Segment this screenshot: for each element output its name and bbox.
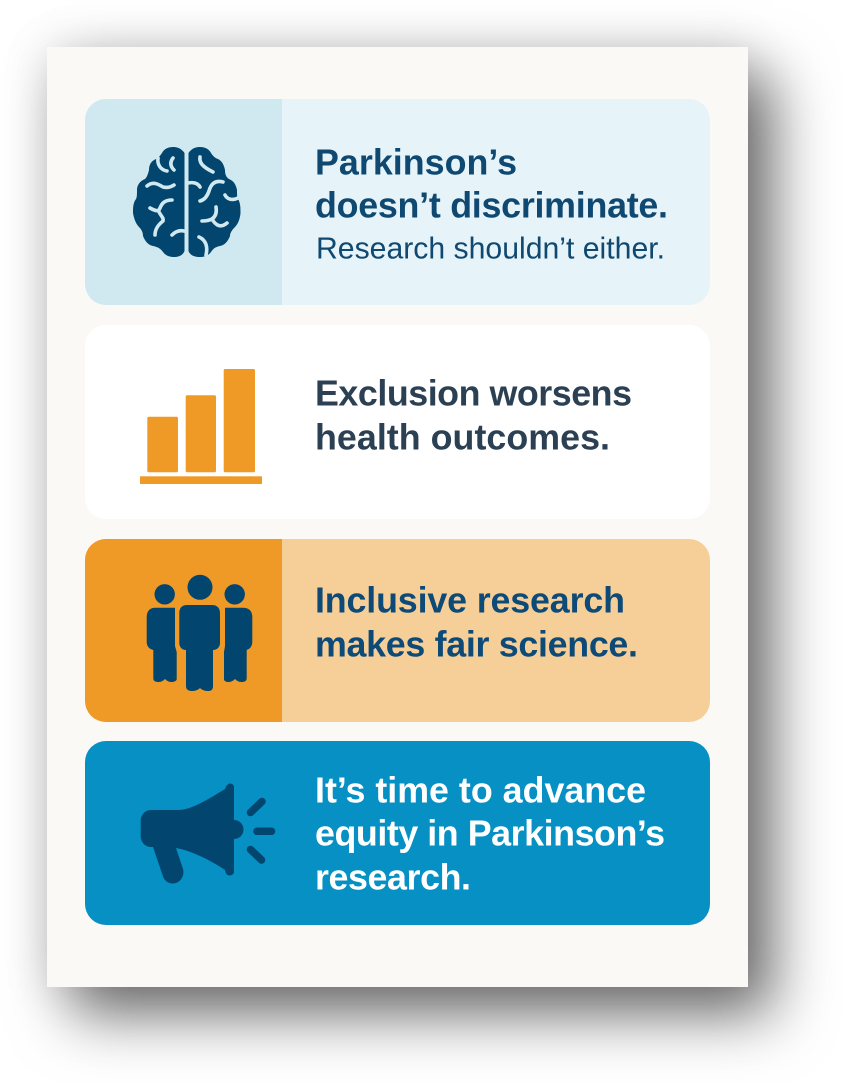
heading: Exclusion worsens health outcomes: health outcomes. [315, 418, 610, 458]
infographic content [85, 99, 710, 925]
heading: Parkinson's doesn't discriminate: Parkinson’s [315, 142, 517, 182]
heading: It's time to advance equity in Parkinson's research: It’s time to advance [315, 770, 646, 810]
icon: bar chart [140, 369, 262, 484]
heading: Inclusive research makes fair science [315, 580, 638, 664]
icon: megaphone [141, 784, 272, 884]
poster background sheet [47, 47, 748, 987]
heading: Parkinson's doesn't discriminate: Research shouldn’t either. [316, 232, 665, 266]
heading: Exclusion worsens health outcomes [315, 374, 632, 458]
panel: It's time to advance equity [85, 741, 710, 925]
heading: Parkinson's doesn't discriminate: doesn’t discriminate. [315, 186, 668, 226]
panel: Parkinson's doesn't discriminate [85, 99, 710, 305]
icon: three people [147, 575, 252, 691]
heading: Inclusive research makes fair science: makes fair science. [315, 624, 638, 664]
heading: Exclusion worsens health outcomes: Exclusion worsens [315, 374, 632, 414]
heading: It's time to advance equity in Parkinson's research: research. [315, 858, 471, 898]
panel: Inclusive research makes fair science [85, 539, 710, 722]
heading: Parkinson's doesn't discriminate [315, 142, 668, 266]
heading: Inclusive research makes fair science: Inclusive research [315, 580, 625, 620]
icon: brain [133, 147, 240, 257]
heading: It's time to advance equity in Parkinson's research [315, 770, 665, 898]
heading: It's time to advance equity in Parkinson's research: equity in Parkinson’s [315, 814, 665, 854]
panel: Exclusion worsens health outcomes [85, 325, 710, 519]
